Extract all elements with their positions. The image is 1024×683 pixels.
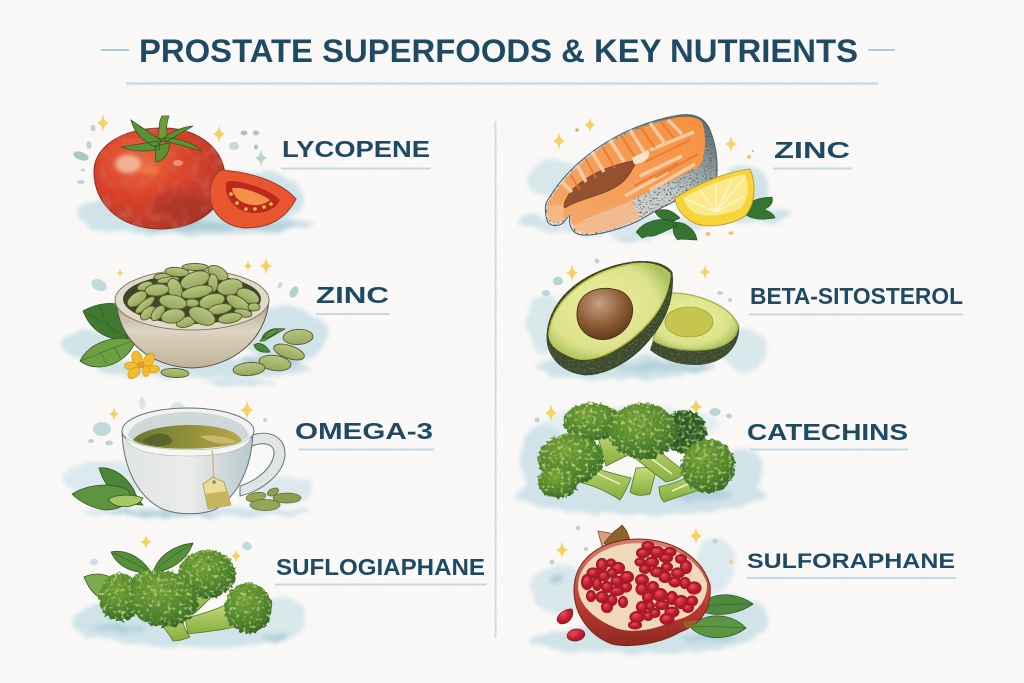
watercolor wash under tomato: [75, 172, 312, 235]
panel: suflogiaphane broccoli: [72, 534, 306, 647]
label: zinc right: ZINC: [774, 137, 850, 163]
pomegranate arils: [582, 542, 700, 628]
pomegranate leaves: [690, 595, 753, 638]
pomegranate crown: [598, 525, 632, 560]
label: omega-3: [295, 418, 434, 450]
watercolor wash under bowl: [62, 307, 327, 385]
sparkles and droplets: [550, 526, 733, 564]
label: beta-sitosterol: BETA-SITOSTEROL: [750, 283, 963, 309]
watercolor wash under broccoli: [72, 596, 306, 647]
tomato body: [94, 128, 225, 229]
loose arils and blossom scar: [557, 609, 698, 642]
panel: zinc salmon: [518, 115, 790, 241]
watercolor wash under cup: [62, 462, 313, 517]
sparkles and droplets: [72, 114, 267, 184]
pomegranate fruit: [574, 539, 710, 646]
label: omega-3: OMEGA-3: [295, 418, 433, 444]
label: sulforaphane: SULFORAPHANE: [747, 550, 955, 573]
front avocado half: [547, 261, 673, 375]
broccoli florets: [538, 403, 735, 498]
panel: sulforaphane pomegranate: [530, 525, 770, 654]
watercolor wash under pomegranate: [530, 537, 770, 654]
label: suflogiaphane: SUFLOGIAPHANE: [276, 554, 485, 580]
watercolor wash under broccoli: [515, 407, 765, 515]
label: catechins: CATECHINS: [747, 419, 908, 445]
broccoli stems: [155, 582, 238, 641]
tomato wedge: [210, 170, 296, 228]
basil leaves left of bowl: [80, 303, 135, 367]
parsley: [636, 197, 775, 240]
tea bag and tag: [203, 450, 231, 509]
panel: zinc pumpkin seeds: [62, 257, 327, 385]
stem highlights: [590, 450, 702, 491]
watercolor wash under salmon: [518, 160, 790, 241]
sparkles and droplets: [542, 258, 732, 302]
back avocado half: [650, 293, 739, 365]
panel: catechins broccoli: [515, 398, 765, 515]
broccoli leaves: [84, 543, 193, 596]
sparkles, steam and droplets: [88, 396, 267, 446]
tomato highlights: [115, 155, 204, 219]
crumbs: [706, 231, 734, 236]
stone bowl: [115, 270, 269, 368]
label: zinc left: [316, 282, 390, 314]
watercolor wash under avocado: [527, 295, 767, 380]
pumpkin seeds in bowl: [125, 262, 262, 329]
panel: omega-3 tea cup: [62, 396, 313, 517]
sparkles and droplets: [89, 257, 300, 299]
broccoli florets: [99, 550, 272, 633]
yellow flower: [124, 350, 160, 381]
stems: [570, 428, 718, 502]
cup body: [122, 408, 254, 514]
sparkles and droplets: [534, 398, 732, 422]
label: zinc right: [773, 137, 852, 168]
tomato calyx: [121, 116, 202, 162]
label: zinc left: ZINC: [316, 282, 389, 308]
cup handle: [240, 433, 285, 496]
label: lycopene: LYCOPENE: [282, 136, 430, 162]
green tea surface: [133, 425, 242, 449]
lemon wedge: [675, 169, 754, 226]
title: PROSTATE SUPERFOODS & KEY NUTRIENTS: [139, 33, 858, 69]
sparkles and droplets: [90, 534, 253, 566]
salmon steak: [545, 115, 717, 235]
panel: lycopene tomato: [72, 114, 312, 235]
panel: beta-sitosterol avocado: [527, 258, 767, 380]
sparkles: [553, 117, 754, 159]
tea leaves: [72, 468, 301, 510]
loose seeds and sprig: [161, 329, 313, 378]
